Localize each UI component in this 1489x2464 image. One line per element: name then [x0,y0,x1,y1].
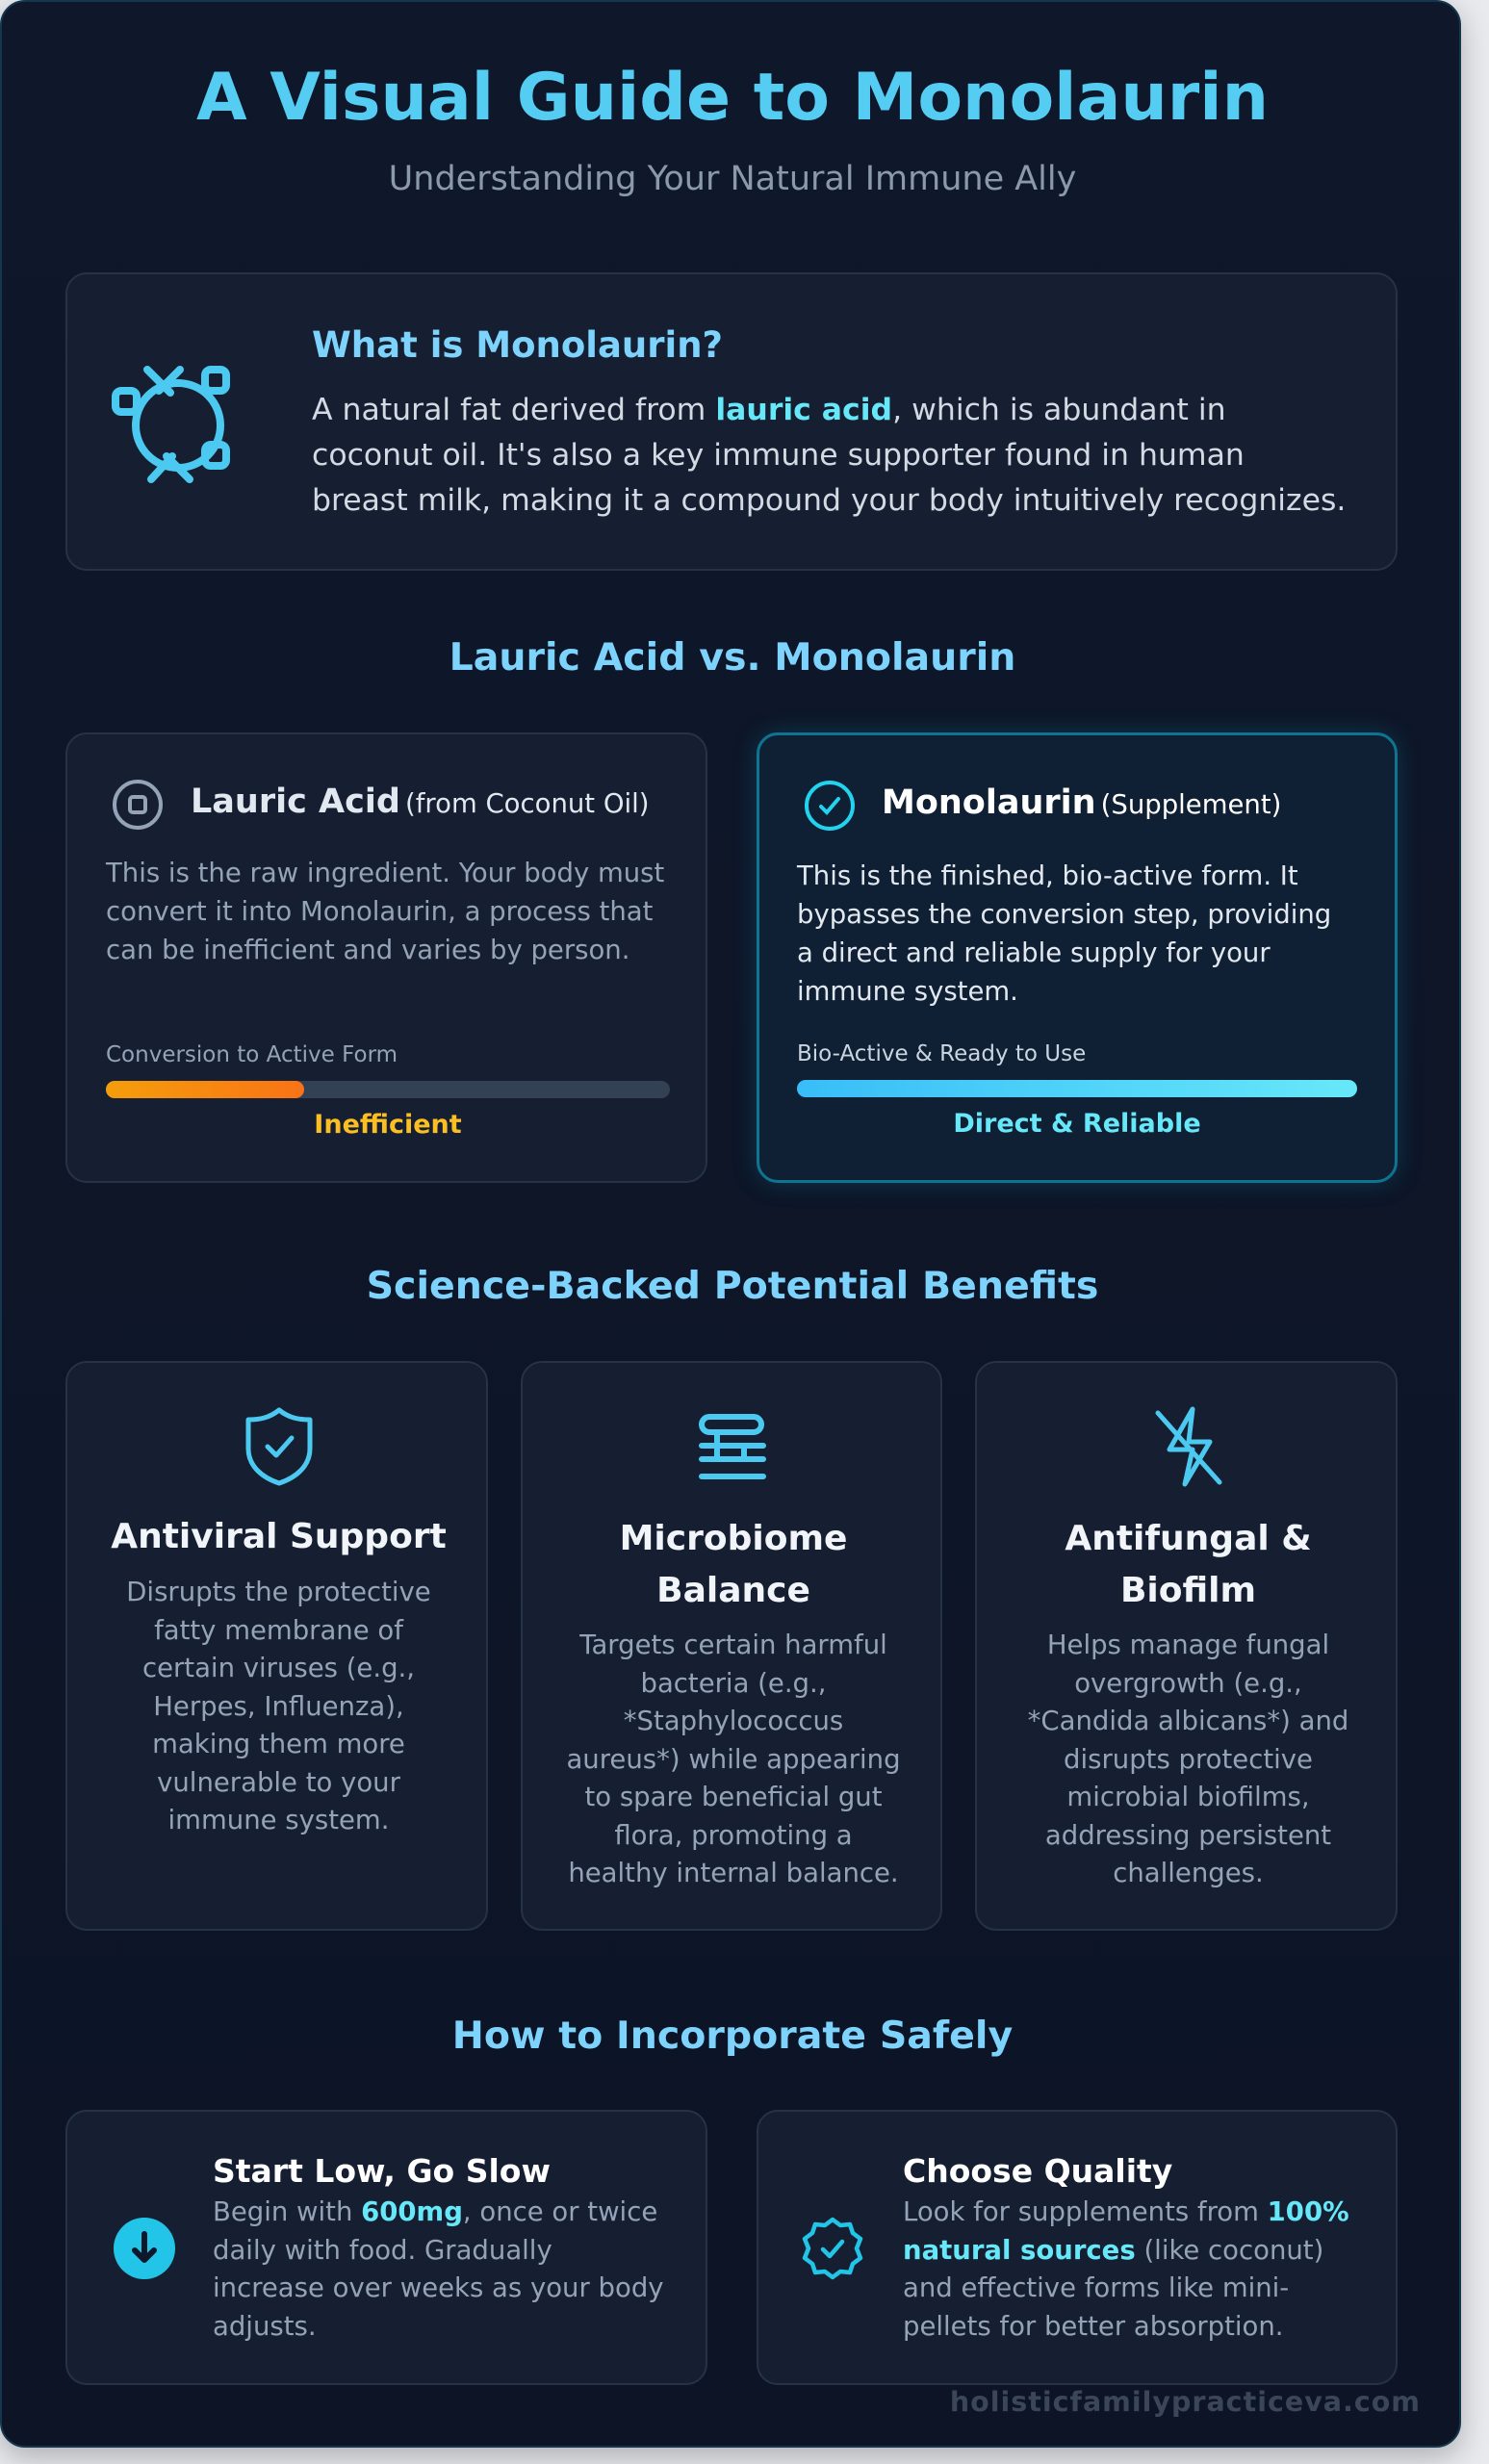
body: adjusts. [213,2310,317,2341]
icon: check circle [805,781,855,831]
bar: conversion [106,1042,670,1140]
panel: monolaurin [757,732,1398,1183]
body [1028,1630,1348,1888]
heading: benefits: Science-Backed Potential Benefits [367,1264,1098,1308]
title: Antifungal & [1065,1519,1312,1558]
heading: safety: How to Incorporate Safely [452,2014,1013,2058]
body [213,2196,664,2341]
body: and effective forms like mini- [903,2272,1289,2303]
title: Antiviral Support [111,1517,447,1556]
body: immune system. [797,976,1018,1007]
icon: lightning slash [1155,1407,1222,1486]
bar: bio-active [797,1041,1357,1139]
title: Biofilm [1120,1571,1256,1610]
icon: gut [699,1414,766,1479]
icon: square in circle [113,780,163,830]
title [620,1519,847,1610]
body: immune system. [168,1805,389,1835]
body: bacteria (e.g., [641,1667,826,1698]
icon: down arrow circle [114,2218,175,2279]
panel: antifungal [975,1361,1398,1931]
body: increase over weeks as your body [213,2272,664,2303]
bar: conversion: Inefficient [314,1110,462,1140]
title: A Visual Guide to Monolaurin [196,60,1269,136]
title: Balance [656,1571,810,1610]
body [106,858,664,965]
body: can be inefficient and varies by person. [106,935,629,965]
panel: choose quality [757,2110,1398,2385]
title: Lauric Acid (from Coconut Oil) [191,783,649,821]
icon: shield [246,1407,312,1486]
panel: antiviral [65,1361,488,1931]
bar: bio-active: Direct & Reliable [953,1109,1201,1139]
title: Microbiome [620,1519,847,1558]
bar: bio-active: Bio-Active & Ready to Use [797,1041,1086,1066]
panel: start low [65,2110,707,2385]
body: flora, promoting a [614,1819,853,1850]
body: Herpes, Influenza), [153,1690,404,1721]
panel: microbiome [521,1361,942,1931]
body: pellets for better absorption. [903,2310,1284,2341]
panel: what is monolaurin [65,272,1398,571]
icon: badge check [803,2218,862,2279]
body: microbial biofilms, [1066,1782,1310,1812]
title [1065,1519,1312,1610]
body: natural sources (like coconut) [903,2235,1323,2266]
icon: molecule [112,366,230,483]
body: *Candida albicans*) and [1028,1706,1348,1736]
body: vulnerable to your [157,1767,400,1798]
body: Helps manage fungal [1047,1630,1329,1660]
title: Start Low, Go Slow [213,2152,551,2190]
footer url: holisticfamilypracticeva.com [950,2386,1421,2418]
body: certain viruses (e.g., [142,1653,415,1683]
body text: breast milk, making it a compound your body intuitively recognizes. [312,483,1346,518]
bar: conversion: Conversion to Active Form [106,1042,398,1067]
body: making them more [152,1729,405,1759]
body: Disrupts the protective [126,1577,431,1607]
body [126,1577,431,1835]
body: This is the finished, bio-active form. It [797,860,1298,891]
body: Targets certain harmful [579,1630,887,1660]
body: fatty membrane of [154,1615,403,1646]
body: addressing persistent [1045,1819,1331,1850]
subtitle: Understanding Your Natural Immune Ally [389,160,1076,198]
title: Monolaurin (Supplement) [882,783,1281,822]
body text [312,393,1346,518]
body: convert it into Monolaurin, a process that [106,896,653,927]
body: Begin with 600mg, once or twice [213,2196,657,2227]
body [566,1630,901,1888]
body: aureus*) while appearing [566,1744,901,1775]
heading: lauric acid vs monolaurin: Lauric Acid vs. Monolaurin [449,635,1015,680]
body: *Staphylococcus [624,1706,843,1736]
body: Look for supplements from 100% [903,2196,1349,2227]
body: daily with food. Gradually [213,2235,552,2266]
body: disrupts protective [1064,1744,1313,1775]
body: challenges. [1113,1858,1264,1888]
body: bypasses the conversion step, providing [797,899,1331,930]
panel: lauric acid [65,732,707,1183]
heading: What is Monolaurin? [312,324,723,366]
body [797,860,1331,1007]
body: healthy internal balance. [568,1858,899,1888]
body: a direct and reliable supply for your [797,937,1271,968]
body: overgrowth (e.g., [1074,1667,1302,1698]
body text: coconut oil. It's also a key immune supporter found in human [312,438,1245,473]
body text: A natural fat derived from lauric acid, which is abundant in [312,393,1226,427]
body: to spare beneficial gut [584,1782,883,1812]
body [903,2196,1349,2341]
body: This is the raw ingredient. Your body must [106,858,664,888]
title: Choose Quality [903,2152,1172,2190]
